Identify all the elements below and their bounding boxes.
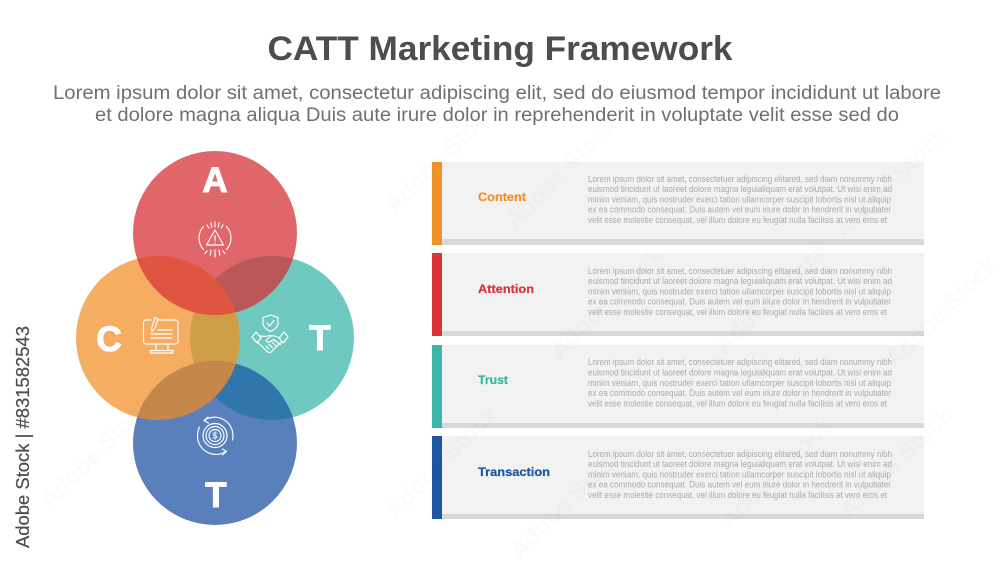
text block: Attention: velit esse molestie consequat, vel illum dolore eu feugiat nulla facilisis at vero eros et <box>588 307 887 317</box>
letter T bottom: T <box>205 476 227 515</box>
text block: Transaction: euismod tincidunt ut laoreet dolore magna leguialiquam erat volutpat. Ut wisi enim ad <box>588 459 892 469</box>
panel: Attention <box>432 253 924 336</box>
text block: Attention: minim veniam, quis nostruder exerci tation ullamcorper suscipit lobortis nisl ut aliquip <box>588 286 891 296</box>
label: Trust: Trust <box>478 373 508 387</box>
accent bar: Transaction <box>432 436 442 519</box>
text block: Trust: euismod tincidunt ut laoreet dolore magna leguialiquam erat volutpat. Ut wisi enim ad <box>588 368 892 378</box>
panel: Content <box>432 162 924 245</box>
watermark: stock id: Adobe Stock | #831582543 <box>13 326 33 548</box>
text block: Trust: velit esse molestie consequat, vel illum dolore eu feugiat nulla facilisis at vero eros et <box>588 398 887 408</box>
text block: Transaction: Lorem ipsum dolor sit amet, consectetuer adipiscing elitared, sed diam nonummy nibh <box>588 449 892 459</box>
subtitle <box>53 83 941 126</box>
text block: Trust: ex ea commodo consequat. Duis autem vel eum iriure dolor in hendrerit in vulputiater <box>588 388 891 398</box>
text block: Content <box>588 174 892 225</box>
label: Transaction: Transaction <box>478 465 550 479</box>
text block: Attention: Lorem ipsum dolor sit amet, consectetuer adipiscing elitared, sed diam nonummy nibh <box>588 266 892 276</box>
text block: Attention: ex ea commodo consequat. Duis autem vel eum iriure dolor in hendrerit in vulputiater <box>588 296 891 306</box>
accent bar: Content <box>432 162 442 245</box>
subtitle: et dolore magna aliqua Duis aute irure dolor in reprehenderit in voluptate velit esse sed do <box>95 105 899 126</box>
text block: Attention: euismod tincidunt ut laoreet dolore magna leguialiquam erat volutpat. Ut wisi enim ad <box>588 276 892 286</box>
icon: handshake with shield <box>252 315 288 353</box>
text block: Attention <box>588 266 892 317</box>
text block: Transaction: velit esse molestie consequat, vel illum dolore eu feugiat nulla facilisis at vero eros et <box>588 490 887 500</box>
icon: monitor with document <box>144 318 178 353</box>
text block: Transaction <box>588 449 892 500</box>
letter C: C <box>96 320 122 359</box>
text block: Trust: minim veniam, quis nostruder exerci tation ullamcorper suscipit lobortis nisl ut aliquip <box>588 378 891 388</box>
venn diagram <box>76 151 354 525</box>
text block: Content: euismod tincidunt ut laoreet dolore magna leguialiquam erat volutpat. Ut wisi enim ad <box>588 184 892 194</box>
text block: Content: velit esse molestie consequat, vel illum dolore eu feugiat nulla facilisis at vero eros et <box>588 215 887 225</box>
letter T right: T <box>309 319 331 358</box>
panel: Trust <box>432 345 924 428</box>
text block: Content: minim veniam, quis nostruder exerci tation ullamcorper suscipit lobortis nisl ut aliquip <box>588 194 891 204</box>
text block: Trust: Lorem ipsum dolor sit amet, consectetuer adipiscing elitared, sed diam nonummy nibh <box>588 357 892 367</box>
text block: Content: Lorem ipsum dolor sit amet, consectetuer adipiscing elitared, sed diam nonummy nibh <box>588 174 892 184</box>
text block: Transaction: ex ea commodo consequat. Duis autem vel eum iriure dolor in hendrerit in vulputiater <box>588 480 891 490</box>
letter A: A <box>202 161 228 200</box>
icon: alert <box>199 222 231 257</box>
text block: Content: ex ea commodo consequat. Duis autem vel eum iriure dolor in hendrerit in vulputiater <box>588 204 891 214</box>
accent bar: Attention <box>432 253 442 336</box>
label: Attention: Attention <box>478 282 534 296</box>
label: Content: Content <box>478 190 526 204</box>
accent bar: Trust <box>432 345 442 428</box>
text block: Trust <box>588 357 892 408</box>
title: CATT Marketing Framework <box>268 30 733 68</box>
text block: Transaction: minim veniam, quis nostruder exerci tation ullamcorper suscipit lobortis nisl ut aliquip <box>588 470 891 480</box>
subtitle: Lorem ipsum dolor sit amet, consectetur adipiscing elit, sed do eiusmod tempor incididunt ut labore <box>53 83 941 104</box>
panel: Transaction <box>432 436 924 519</box>
icon: coin with cycle arrows <box>198 417 233 455</box>
